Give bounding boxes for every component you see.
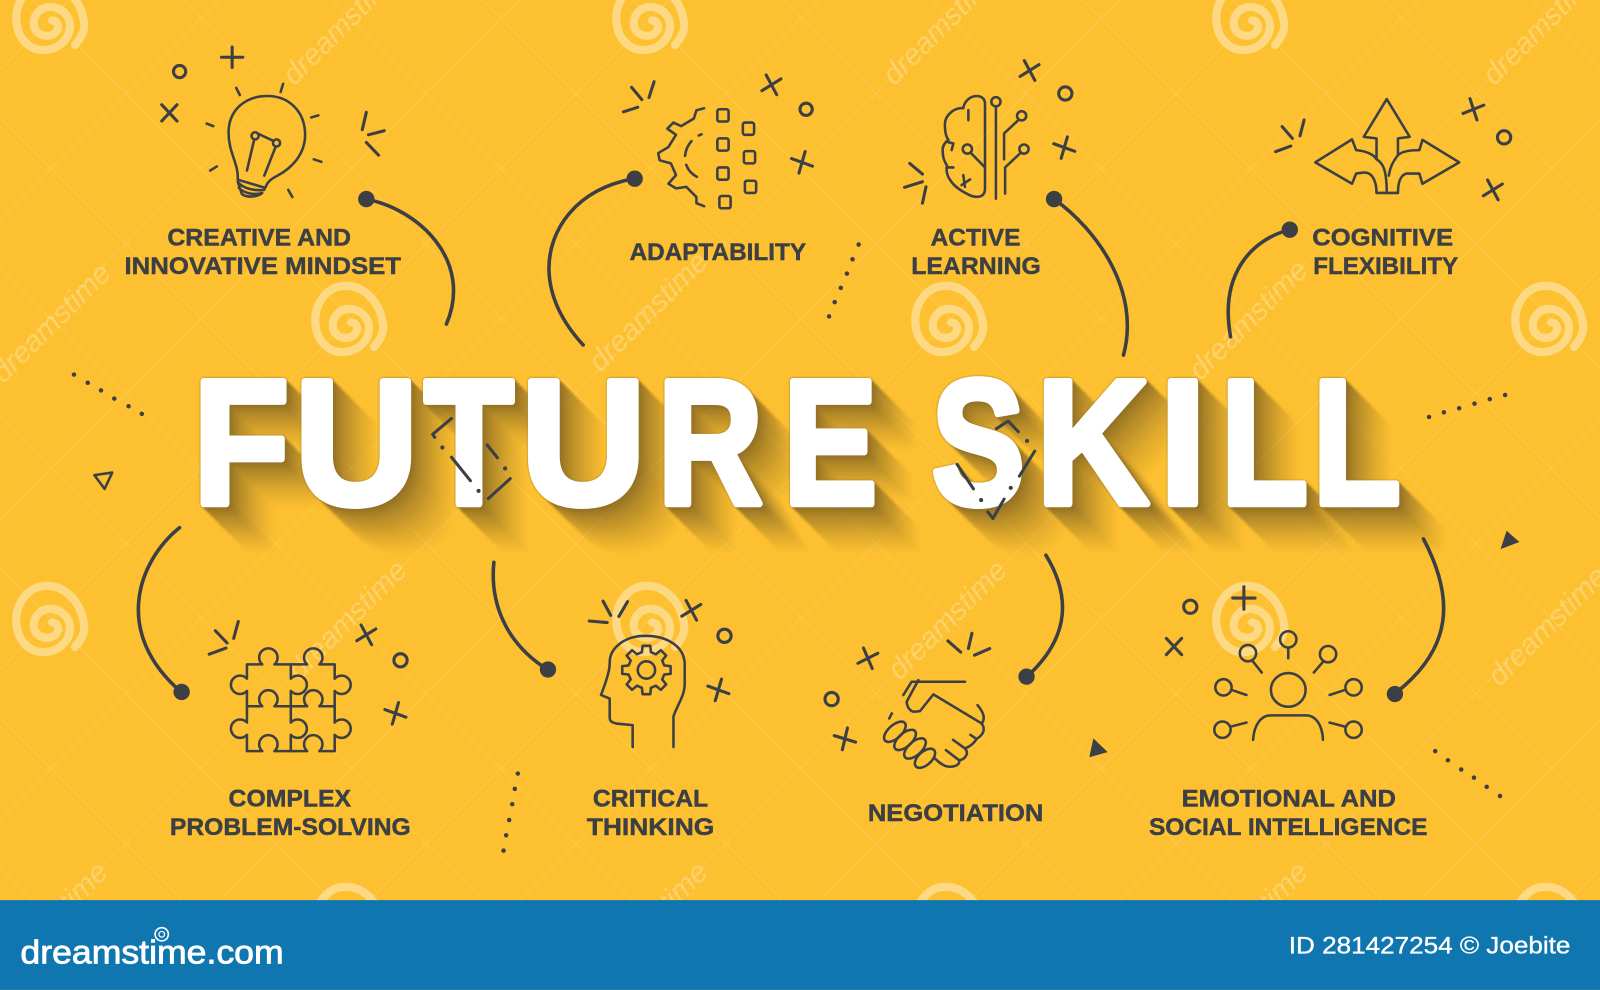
watermark swirls and text: dreamstime bbox=[582, 856, 715, 988]
triangle outline bbox=[94, 473, 112, 489]
label: creative and innovative mindset: INNOVATIVE MINDSET bbox=[124, 253, 401, 280]
title: FUTURE SKILL with long shadow: T bbox=[424, 344, 514, 542]
label: emotional and social intelligence: EMOTIONAL AND bbox=[1182, 786, 1396, 813]
icon: head with gear bbox=[589, 600, 731, 747]
label: active learning bbox=[911, 225, 1041, 280]
label: cognitive flexibility bbox=[1312, 225, 1458, 280]
title: FUTURE SKILL with long shadow: R bbox=[658, 344, 763, 542]
connector arcs bbox=[138, 171, 1444, 702]
icon: gear with squares bbox=[623, 75, 813, 208]
label: negotiation: NEGOTIATION bbox=[868, 800, 1043, 827]
dashed diamond over S bbox=[957, 421, 1035, 518]
label: critical thinking: CRITICAL bbox=[593, 786, 708, 813]
title: FUTURE SKILL with long shadow: L bbox=[1221, 344, 1308, 542]
title: FUTURE SKILL with long shadow: U bbox=[521, 344, 646, 542]
label: critical thinking: THINKING bbox=[587, 814, 714, 841]
title: FUTURE SKILL with long shadow: U bbox=[295, 343, 418, 541]
icon: puzzle bbox=[209, 622, 407, 751]
footer bar bbox=[0, 900, 1600, 990]
label: creative and innovative mindset bbox=[124, 225, 401, 280]
title: FUTURE SKILL with long shadow: S bbox=[932, 342, 1025, 541]
title: FUTURE SKILL with long shadow bbox=[193, 342, 1401, 542]
title: FUTURE SKILL with long shadow: I bbox=[1160, 344, 1206, 542]
dashed diamond over T bbox=[433, 418, 510, 499]
title: FUTURE SKILL with long shadow: K bbox=[1037, 344, 1149, 542]
label: active learning: LEARNING bbox=[911, 253, 1041, 280]
title: FUTURE SKILL with long shadow: E bbox=[783, 343, 877, 541]
label: complex problem-solving bbox=[170, 786, 411, 841]
watermark swirls and text: dreamstime bbox=[1182, 856, 1315, 988]
filled triangle bottom bbox=[1089, 738, 1108, 757]
label: creative and innovative mindset: CREATIVE AND bbox=[167, 225, 351, 252]
label: cognitive flexibility: COGNITIVE bbox=[1312, 225, 1453, 252]
title: FUTURE SKILL with long shadow: F bbox=[193, 343, 289, 542]
watermark swirls and text: dreamstime bbox=[881, 554, 1014, 686]
icon: handshake bbox=[825, 633, 990, 771]
watermark swirls and text: dreamstime bbox=[1182, 254, 1315, 386]
label: complex problem-solving: COMPLEX bbox=[229, 786, 352, 813]
dotted decorative lines bbox=[72, 242, 1507, 853]
icon: brain circuit bbox=[905, 61, 1075, 203]
filled triangle right bbox=[1501, 531, 1519, 549]
icon: person with network nodes bbox=[1166, 587, 1362, 740]
title: FUTURE SKILL with long shadow: L bbox=[1313, 345, 1401, 542]
watermark swirls and text: dreamstime bbox=[582, 245, 715, 378]
label: emotional and social intelligence bbox=[1149, 786, 1428, 841]
watermark swirls and text: dreamstime bbox=[281, 554, 414, 686]
label: cognitive flexibility: FLEXIBILITY bbox=[1313, 253, 1458, 280]
label: critical thinking bbox=[587, 786, 714, 841]
label: adaptability: ADAPTABILITY bbox=[630, 239, 806, 266]
icon: three way arrows bbox=[1276, 99, 1511, 200]
icon: light bulb bbox=[162, 47, 384, 197]
footer image id text: ID 281427254 © Joebite bbox=[1289, 933, 1570, 960]
label: complex problem-solving: PROBLEM-SOLVING bbox=[170, 814, 411, 841]
label: emotional and social intelligence: SOCIAL INTELLIGENCE bbox=[1149, 814, 1428, 841]
label: active learning: ACTIVE bbox=[931, 225, 1020, 252]
footer logo text: dreamstime.com bbox=[20, 934, 284, 971]
